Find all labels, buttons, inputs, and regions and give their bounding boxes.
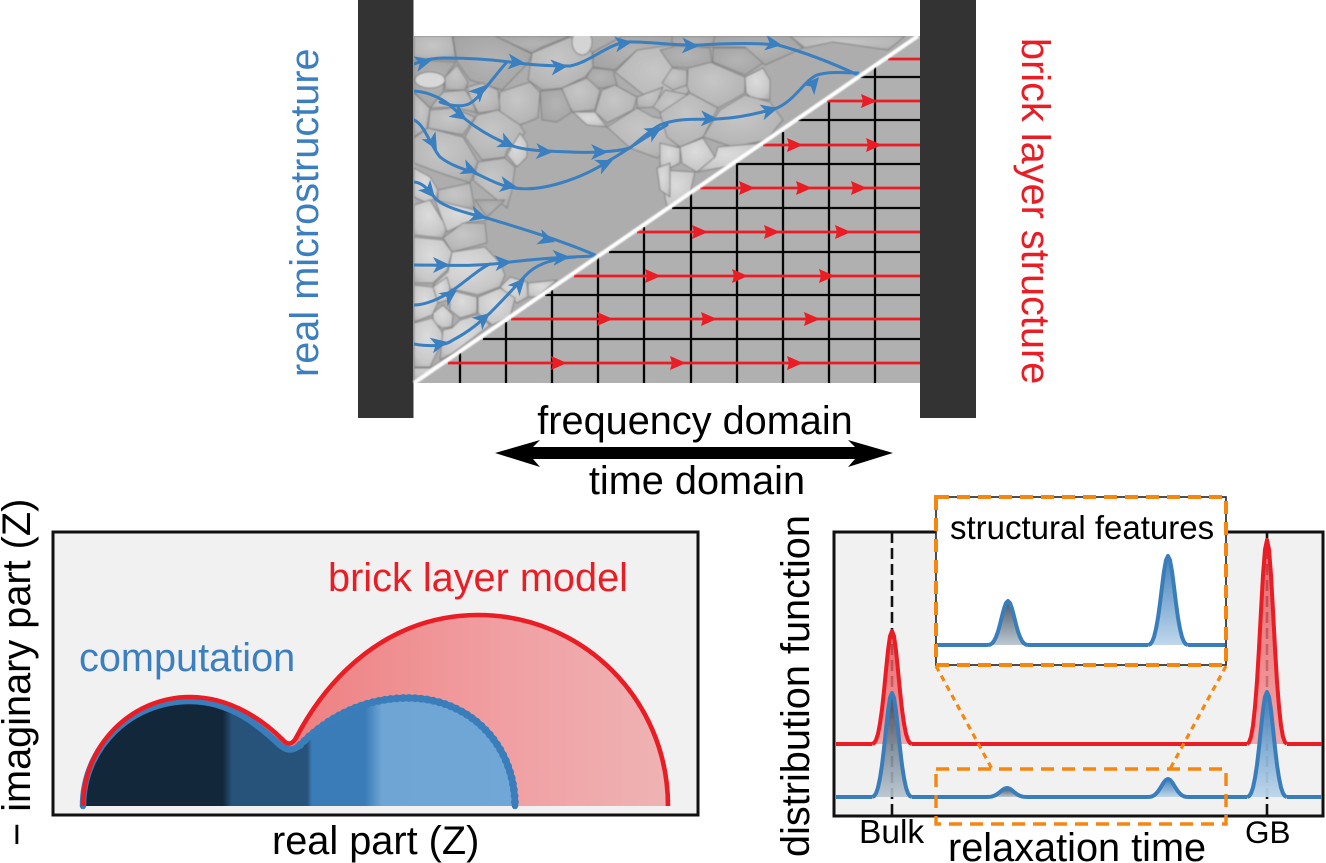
label: frequency domain: frequency domain: [537, 399, 853, 443]
x axis label: real part: real part (Z): [272, 819, 479, 863]
peak fills: [872, 540, 1287, 797]
black grid lines: [460, 67, 920, 383]
left electrode bar: [358, 0, 414, 418]
inset title: structural features: [950, 509, 1214, 546]
red spectrum: [836, 540, 1322, 744]
blue current paths: [414, 42, 858, 346]
brick layer model curve: [83, 615, 668, 806]
right electrode bar: [920, 0, 976, 418]
label: real microstructure: real microstructure: [283, 48, 327, 377]
computation curve beads: [300, 698, 515, 806]
double-headed arrow: [495, 440, 893, 467]
computation curve: [83, 698, 515, 806]
grains: [414, 29, 905, 383]
inset: structural features: [936, 497, 1226, 665]
brick layer model fill: [83, 615, 668, 806]
inset spectrum: [936, 556, 1225, 645]
label: time domain: time domain: [589, 459, 805, 503]
panel: real microstructure SEM image: [414, 29, 920, 383]
tick label: Bulk: Bulk: [859, 814, 924, 851]
panel: Nyquist plot: [53, 532, 698, 815]
panel: brick layer structure grid: [414, 36, 920, 383]
white diagonal divider: [414, 36, 918, 383]
inset orange dashed frame: [936, 497, 1226, 665]
zoom connector lines: [936, 666, 1226, 769]
orange selection box: [936, 769, 1226, 824]
dashed markers Bulk and GB: [892, 532, 1267, 817]
computation fill: [83, 698, 515, 806]
panel: distribution function plot: [834, 532, 1323, 817]
blue spectrum: [836, 692, 1322, 797]
inset peak fills: [988, 556, 1188, 645]
tick label: GB: GB: [1245, 814, 1291, 850]
label: computation: computation: [79, 636, 295, 680]
red current lines: [448, 59, 920, 363]
blue arrowheads: [414, 34, 825, 353]
label: brick layer model: brick layer model: [328, 556, 628, 600]
y axis label: distribution function: distribution function: [774, 515, 818, 857]
red arrowheads: [551, 94, 882, 370]
label: brick layer structure: brick layer structure: [1013, 38, 1057, 384]
